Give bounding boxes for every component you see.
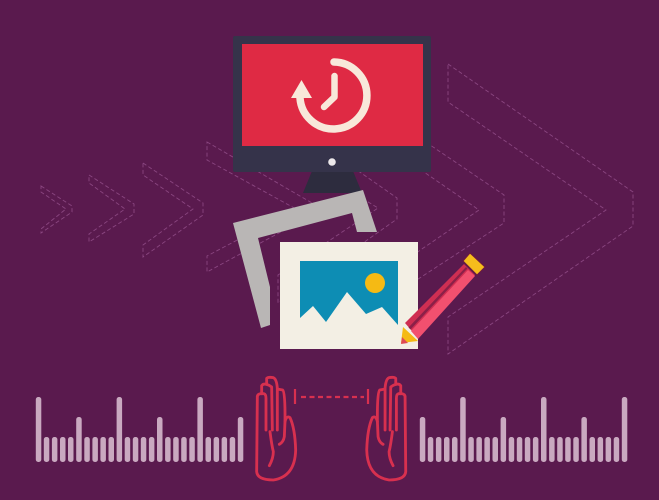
chevron 3 bbox=[143, 163, 203, 257]
chevron 2 bbox=[89, 175, 134, 242]
icon: left hand bbox=[257, 377, 296, 480]
pencil dark side bbox=[405, 264, 475, 338]
left ruler bars bbox=[36, 397, 243, 462]
monitor screen bbox=[242, 44, 423, 146]
right ruler bars bbox=[420, 397, 627, 462]
chevron 7 bbox=[448, 64, 633, 354]
photo sky bbox=[300, 261, 398, 325]
photo sun bbox=[365, 273, 385, 293]
chevron 4 bbox=[207, 142, 312, 272]
icon: history clock bbox=[291, 62, 367, 129]
icon: monitor bbox=[233, 36, 431, 193]
chevron 6 bbox=[340, 84, 504, 330]
dashed distance marker between hands bbox=[295, 389, 368, 404]
monitor body bbox=[233, 36, 431, 172]
photo mountains bbox=[300, 292, 398, 335]
pencil tip point bbox=[401, 337, 408, 344]
pencil tip wood bbox=[401, 327, 418, 343]
monitor stand bbox=[303, 171, 362, 193]
photo paper bbox=[280, 242, 418, 349]
arrow head bbox=[291, 80, 312, 98]
icon: pencil bbox=[401, 253, 485, 344]
dashed chevron arrows bbox=[41, 64, 633, 354]
icon: right hand bbox=[367, 377, 406, 480]
pencil shadow groove bbox=[408, 267, 468, 330]
chevron 1 bbox=[41, 186, 72, 233]
clock arc bbox=[300, 62, 367, 129]
chevron 5 bbox=[278, 115, 397, 303]
pencil eraser bbox=[463, 253, 485, 275]
icon: photo card bbox=[280, 242, 418, 349]
clock hands bbox=[324, 76, 334, 107]
icon: grey back frame bbox=[233, 190, 377, 328]
pencil light side bbox=[411, 270, 475, 339]
power button bbox=[328, 158, 336, 166]
